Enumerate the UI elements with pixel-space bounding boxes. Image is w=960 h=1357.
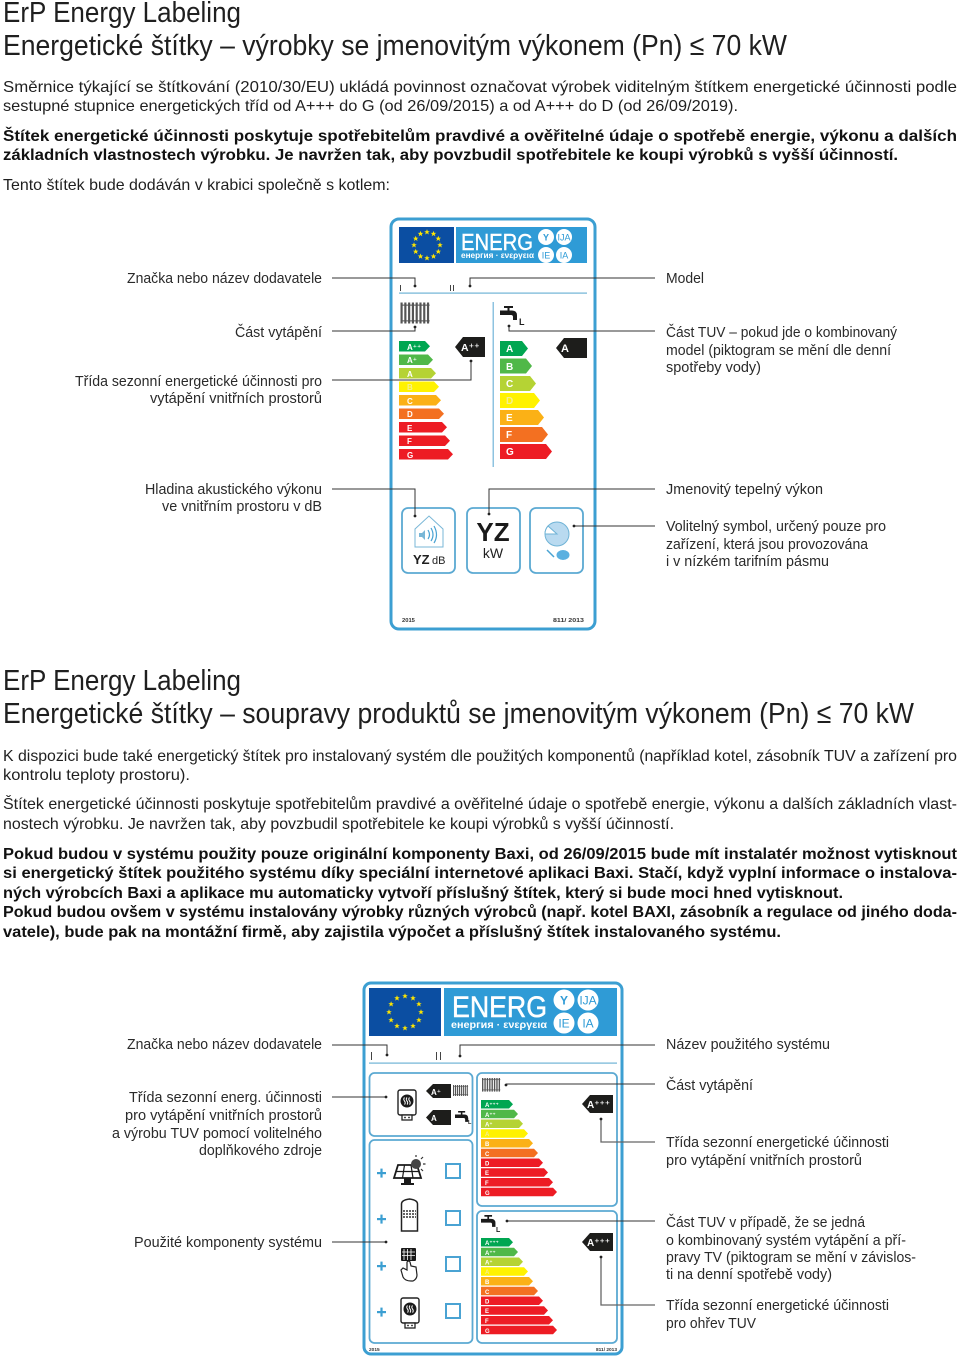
- icon: rated output box: YZ: [476, 517, 510, 547]
- labels: system label right: pro ohřev TUV: [666, 1316, 756, 1332]
- text block: section 1 intro: [3, 79, 957, 194]
- tag: heating class A++: [455, 337, 485, 357]
- text block: section 2 paragraphs: kontrolu teploty prostoru).: [3, 767, 190, 784]
- labels: system label left: pro vytápění vnitřních prostorů: [125, 1108, 322, 1124]
- panel: system package energy label: [364, 983, 622, 1354]
- labels: system label right: [666, 1037, 916, 1332]
- water heating efficiency scale: A: [506, 344, 513, 355]
- system water scale: C: [485, 1290, 490, 1296]
- header: ENERG banner: [444, 988, 617, 1036]
- header: ENERG banner: IA: [560, 250, 568, 260]
- text block: section 2 paragraphs: si energetický štítek použitého systému díky speciální internetové aplikaci Baxi. Stačí, když vyplní informace o instalova-: [3, 865, 957, 882]
- icon: off-peak tariff box: [530, 508, 583, 573]
- icon: tap: [500, 306, 525, 327]
- tag: water heating class A: A: [561, 343, 569, 355]
- system water scale: G: [485, 1329, 490, 1335]
- system water scale: A⁺⁺⁺: [485, 1240, 499, 1247]
- labels: system label right: Část vytápění: [666, 1077, 753, 1094]
- supplier and model marks: [399, 285, 587, 467]
- water heating efficiency scale: [500, 341, 552, 459]
- panel: product energy label: [391, 219, 595, 629]
- system water scale: F: [485, 1319, 489, 1325]
- labels: system label right: Název použitého systému: [666, 1037, 830, 1053]
- text block: section 2 paragraphs: K dispozici bude také energetický štítek pro instalovaný systém dle použitých komponentů (například kotel, zásobník TUV a zařízení pro: [3, 747, 957, 765]
- plus signs: [377, 1169, 386, 1317]
- heating efficiency scale: E: [407, 424, 413, 433]
- system water scale: A: [485, 1270, 490, 1276]
- system heating scale: B: [485, 1142, 490, 1148]
- heating efficiency scale: [399, 341, 453, 460]
- system heating scale: A⁺⁺: [485, 1112, 496, 1119]
- icon: radiator: [482, 1078, 500, 1092]
- text block: section 2 paragraphs: nostech výrobku. Je navržen tak, aby povzbudil spotřebitele ke koupi výrobků s vyšší účinností.: [3, 815, 674, 833]
- system heating scale: G: [485, 1191, 490, 1197]
- labels: product label left: ve vnitřním prostoru v dB: [162, 499, 322, 515]
- box: system components: [370, 1140, 472, 1343]
- icon: noise level box: YZ: [413, 552, 430, 567]
- system water scale: E: [485, 1309, 489, 1315]
- box: water heating scale: [477, 1211, 617, 1343]
- labels: product label right: spotřeby vody): [666, 360, 761, 376]
- labels: product label left: [75, 271, 322, 515]
- labels: system label left: doplňkového zdroje: [199, 1143, 322, 1159]
- heating efficiency scale: D: [407, 410, 413, 419]
- heating efficiency scale: F: [407, 437, 412, 446]
- heating efficiency scale: A: [407, 370, 413, 379]
- header: ENERG banner: ENERG: [461, 229, 533, 255]
- heating efficiency scale: A⁺⁺: [407, 343, 421, 352]
- icon: rated output box: kW: [483, 545, 504, 561]
- labels: product label left: vytápění vnitřních prostorů: [150, 391, 322, 407]
- text block: section 1 intro: základních vlastnostech výrobku. Je navržen tak, aby povzbudil spotřebitele ke koupi výrobků s vyšší účinností.: [3, 147, 898, 164]
- header: ENERG banner: Y: [543, 232, 549, 242]
- labels: product label right: model (piktogram se mění dle denní: [666, 343, 891, 359]
- title: section 1: Energetické štítky – výrobky se jmenovitým výkonem (Pn) ≤ 70 kW: [3, 30, 788, 62]
- water heating efficiency scale: D: [506, 396, 513, 407]
- heating efficiency scale: C: [407, 397, 413, 406]
- water heating efficiency scale: F: [506, 430, 512, 441]
- labels: product label left: Hladina akustického výkonu: [145, 482, 322, 498]
- header: ENERG banner: Y: [560, 994, 568, 1008]
- icon: small tap: L: [468, 1120, 472, 1126]
- text block: section 2 paragraphs: ných výrobcích Baxi a aplikace mu automaticky vytvoří příslušný štítek, který si bude moci hned vytisknout.: [3, 885, 843, 902]
- icon: tap: L: [496, 1227, 501, 1234]
- icon: tap: L: [519, 317, 525, 327]
- icon: boiler: [398, 1090, 416, 1120]
- footer: label codes: 811/ 2013: [596, 1347, 617, 1353]
- labels: system label right: Třída sezonní energetické účinnosti: [666, 1298, 889, 1314]
- header: ENERG banner: IJA: [557, 232, 571, 242]
- title: section 2: ErP Energy Labeling: [3, 665, 241, 697]
- text block: section 2 paragraphs: Pokud budou ovšem v systému instalovány výrobky různých výrobců (např. kotel BAXI, zásobník a regulace od jiného doda-: [3, 904, 957, 921]
- water heating efficiency scale: E: [506, 413, 513, 424]
- tag: water heating class A: [556, 338, 587, 358]
- icon: hand on control keypad: [401, 1248, 417, 1281]
- header: ENERG banner: IA: [582, 1016, 594, 1030]
- icon: noise level box: [402, 508, 455, 573]
- icon: rated output box: [467, 508, 520, 573]
- icon: radiator: [400, 302, 430, 324]
- labels: system label left: a výrobu TUV pomocí volitelného: [112, 1126, 322, 1142]
- system heating scale: [481, 1100, 557, 1197]
- water heating efficiency scale: G: [506, 447, 514, 458]
- text block: section 1 intro: Štítek energetické účinnosti poskytuje spotřebitelům pravdivé a ověřitelné údaje o spotřebě energie, výkonu a dalších: [3, 126, 957, 145]
- header: ENERG banner: IJA: [579, 994, 597, 1008]
- icon: small radiator: [453, 1085, 468, 1096]
- heating efficiency scale: B: [407, 383, 413, 392]
- labels: system label left: Značka nebo název dodavatele: [127, 1037, 322, 1053]
- labels: system label right: Třída sezonní energetické účinnosti: [666, 1135, 889, 1151]
- system water scale: A⁺⁺: [485, 1250, 496, 1257]
- labels: product label right: Volitelný symbol, určený pouze pro: [666, 519, 886, 535]
- labels: product label right: zařízení, která jsou provozována: [666, 537, 869, 553]
- labels: product label left: Třída sezonní energetické účinnosti pro: [75, 374, 322, 390]
- tag: system water class: A⁺⁺⁺: [587, 1238, 610, 1249]
- system heating scale: A⁺: [485, 1122, 492, 1128]
- labels: product label right: Jmenovitý tepelný výkon: [666, 482, 823, 498]
- system heating scale: E: [485, 1171, 489, 1177]
- footer: label codes: 2015: [369, 1347, 380, 1353]
- text block: section 2 paragraphs: [3, 747, 958, 941]
- heating efficiency scale: A⁺: [407, 356, 417, 365]
- labels: system label right: pro vytápění vnitřních prostorů: [666, 1153, 862, 1169]
- footer: label codes: [402, 618, 585, 624]
- heating efficiency scale: G: [407, 451, 413, 460]
- text block: section 1 intro: Tento štítek bude dodáván v krabici společně s kotlem:: [3, 177, 390, 194]
- labels: system label right: Část TUV v případě, že se jedná: [666, 1214, 866, 1231]
- leader lines: product label: [332, 278, 655, 527]
- header: ENERG banner: енергия · ενεργεια: [451, 1019, 548, 1031]
- system heating scale: D: [485, 1162, 490, 1168]
- text block: section 2 paragraphs: vatele), bude pak na montážní firmě, aby zajistila výpočet a příslušný štítek instalovaného systému.: [3, 924, 781, 941]
- tag: boiler heating class: A⁺: [431, 1088, 441, 1097]
- labels: product label left: Část vytápění: [235, 324, 322, 341]
- title: section 1: [3, 0, 788, 62]
- text block: section 1 intro: Směrnice týkající se štítkování (2010/30/EU) ukládá povinnost označovat výrobek viditelným štítkem energetické účinnosti podle: [3, 79, 957, 96]
- text block: section 2 paragraphs: Pokud budou v systému použity pouze originální komponenty Baxi, od 26/09/2015 bude mít instalatér možnost vytisknout: [3, 846, 958, 863]
- system heating scale: F: [485, 1181, 489, 1187]
- icon: EU flag: [369, 988, 441, 1036]
- text block: section 1 intro: sestupné stupnice energetických tříd od A+++ do G (od 26/09/2015) a od A+++ do D (od 26/09/2019).: [3, 98, 738, 115]
- labels: product label right: i v nízkém tarifním pásmu: [666, 554, 829, 570]
- labels: system label left: [112, 1037, 322, 1251]
- system water scale: B: [485, 1280, 490, 1286]
- checkboxes: [446, 1164, 460, 1318]
- header: ENERG banner: енергия · ενεργεια: [461, 251, 534, 260]
- tag: heating class A++: A⁺⁺: [461, 342, 480, 354]
- header: ENERG banner: IE: [558, 1016, 570, 1030]
- system heating scale: A⁺⁺⁺: [485, 1102, 499, 1109]
- labels: product label left: Značka nebo název dodavatele: [127, 271, 322, 287]
- title: section 2: [3, 665, 915, 730]
- icon: boiler: [401, 1298, 419, 1328]
- text block: section 2 paragraphs: Štítek energetické účinnosti poskytuje spotřebitelům pravdivé a ověřitelné údaje o spotřebě energie, výkonu a dalších základních vlast-: [3, 794, 957, 813]
- system heating scale: A: [485, 1132, 490, 1138]
- icon: noise level box: dB: [432, 555, 445, 567]
- labels: product label right: Model: [666, 271, 704, 287]
- water heating efficiency scale: B: [506, 362, 513, 373]
- box: boiler summary: [370, 1073, 472, 1136]
- footer: label codes: 811/ 2013: [553, 618, 585, 624]
- header: ENERG banner: ENERG: [452, 991, 547, 1024]
- tag: system heating class: A⁺⁺⁺: [587, 1100, 610, 1111]
- icon: solar panel: [394, 1155, 426, 1185]
- leader lines: system label: [332, 1045, 655, 1305]
- icon: EU flag: [399, 227, 454, 263]
- tag: boiler water class: A: [431, 1114, 437, 1123]
- labels: product label right: Část TUV – pokud jde o kombinovaný: [666, 324, 898, 341]
- system water scale: A⁺: [485, 1260, 492, 1266]
- header: ENERG banner: IE: [542, 250, 550, 260]
- system heating scale: C: [485, 1152, 490, 1158]
- labels: system label left: Třída sezonní energ. účinnosti: [129, 1090, 322, 1106]
- footer: label codes: [369, 1347, 617, 1353]
- box: heating scale: [477, 1073, 617, 1206]
- labels: product label right: [666, 271, 898, 570]
- labels: system label right: o kombinovaný systém vytápění a pří-: [666, 1233, 906, 1249]
- labels: system label left: Použité komponenty systému: [134, 1235, 322, 1251]
- footer: label codes: 2015: [402, 618, 416, 624]
- system water scale: D: [485, 1300, 490, 1306]
- supplier and system marks: [369, 1052, 617, 1064]
- labels: system label right: pravy TV (piktogram se mění v závislos-: [666, 1250, 916, 1266]
- icon: storage tank: [402, 1199, 418, 1231]
- water heating efficiency scale: C: [506, 379, 513, 390]
- labels: system label right: ti na denní spotřebě vody): [666, 1267, 832, 1283]
- header: ENERG banner: [456, 227, 587, 263]
- system water scale: [481, 1238, 557, 1335]
